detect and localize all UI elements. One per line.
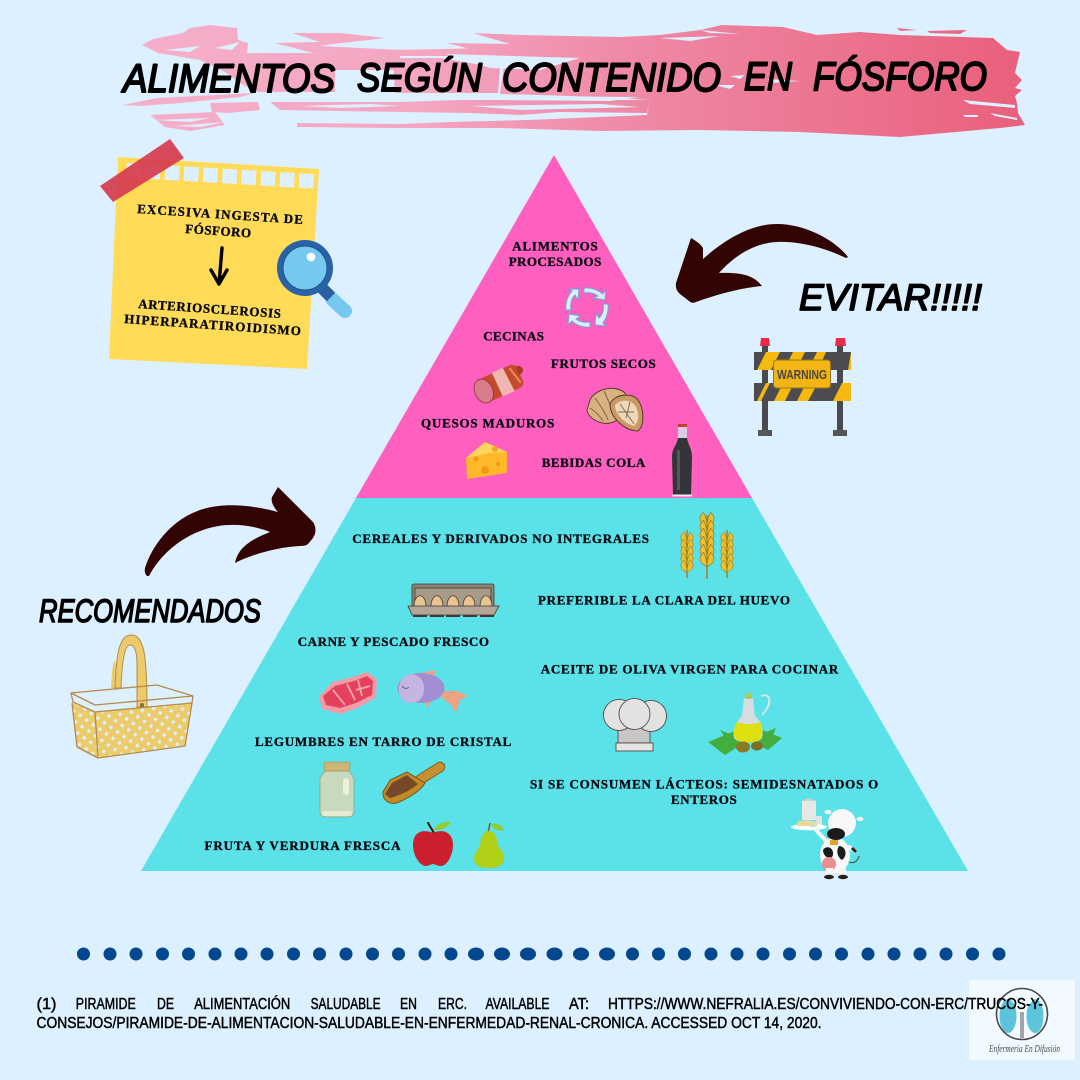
- panel: sticky note: [100, 139, 345, 369]
- pink tier labels: ALIMENTOS: [512, 238, 598, 253]
- footnote citation: AT:: [569, 996, 589, 1013]
- arrow: recomendados: [145, 487, 316, 576]
- cyan tier labels: ENTEROS: [671, 792, 737, 807]
- cyan tier labels: PREFERIBLE LA CLARA DEL HUEVO: [538, 592, 790, 607]
- icon: pear: [474, 823, 504, 868]
- cyan tier labels: SI SE CONSUMEN LÁCTEOS: SEMIDESNATADOS O: [530, 776, 878, 791]
- dotted divider: [77, 948, 1006, 960]
- icon: walnuts: [587, 388, 643, 431]
- pyramid tier: recomendados: [141, 498, 968, 871]
- note holes: [126, 163, 314, 189]
- pink tier labels: FRUTOS SECOS: [551, 356, 656, 371]
- pyramid: [141, 155, 968, 871]
- cyan tier labels: CEREALES Y DERIVADOS NO INTEGRALES: [352, 531, 649, 546]
- note text: HIPERPARATIROIDISMO: [124, 311, 301, 338]
- note text: FÓSFORO: [185, 221, 252, 240]
- icon: cola bottle: [672, 424, 692, 496]
- warning sign text: WARNING: [777, 367, 827, 382]
- title brush stroke: [123, 25, 1025, 137]
- pyramid tier: evitar: [356, 155, 752, 498]
- cyan tier labels: LEGUMBRES EN TARRO DE CRISTAL: [255, 734, 512, 749]
- down arrow: [211, 248, 227, 284]
- footnote citation: DE: [157, 996, 174, 1013]
- icon: salami: [470, 360, 530, 407]
- logo: [969, 980, 1075, 1060]
- cyan tier labels: [204, 531, 878, 853]
- arrow: evitar: [676, 224, 848, 303]
- icon: recycle arrows: [566, 288, 608, 327]
- cyan tier labels: CARNE Y PESCADO FRESCO: [298, 634, 489, 649]
- title: ALIMENTOS: [121, 57, 335, 101]
- footnote citation: CONSEJOS/PIRAMIDE-DE-ALIMENTACION-SALUDABLE-EN-ENFERMEDAD-RENAL-CRONICA. ACCESSED OCT 14, 2020.: [36, 1015, 822, 1032]
- note text: EXCESIVA INGESTA DE: [137, 201, 303, 227]
- icon: basket: [71, 635, 193, 758]
- heading: recomendados: RECOMENDADOS: [39, 593, 261, 629]
- icon: warning barrier: [754, 338, 851, 436]
- icon: chef hat: [604, 698, 666, 751]
- note text: ARTERIOSCLEROSIS: [138, 296, 281, 321]
- title: EN: [744, 55, 792, 99]
- footnote citation: ALIMENTACIÓN: [194, 996, 290, 1013]
- note text: [124, 201, 303, 338]
- icon: magnifying glass: [277, 240, 345, 311]
- title: SEGÚN: [357, 55, 482, 100]
- cyan tier labels: ACEITE DE OLIVA VIRGEN PARA COCINAR: [541, 661, 839, 676]
- cyan tier labels: FRUTA Y VERDURA FRESCA: [204, 838, 401, 853]
- pink tier labels: QUESOS MADUROS: [421, 415, 554, 430]
- icon: cheese: [466, 442, 507, 479]
- pink tier labels: CECINAS: [483, 329, 544, 344]
- footnote citation: AVAILABLE: [486, 996, 550, 1013]
- icon: olive oil: [708, 693, 782, 755]
- footnote citation: (1): [36, 996, 56, 1013]
- footnote citation: ERC.: [438, 996, 467, 1013]
- heading: evitar: EVITAR!!!!!: [799, 277, 982, 318]
- pink tier labels: BEBIDAS COLA: [542, 455, 646, 470]
- icon: wheat: [681, 512, 733, 579]
- pink tier labels: [421, 238, 656, 470]
- icon: egg carton: [408, 584, 499, 616]
- title: CONTENIDO: [502, 56, 721, 100]
- icon: cow with dairy tray: [791, 798, 864, 879]
- icon: wooden scoop with legumes: [383, 767, 440, 803]
- footnote citation: EN: [400, 996, 417, 1013]
- icon: meat: [320, 673, 376, 713]
- footnote citation: [36, 996, 1043, 1032]
- title: FÓSFORO: [813, 54, 987, 99]
- icon: fish: [398, 670, 468, 713]
- note paper: [109, 157, 319, 369]
- footnote citation: PIRAMIDE: [76, 996, 136, 1013]
- icon: glass jar: [320, 762, 354, 817]
- red tape: [100, 139, 184, 202]
- icon: apple: [413, 822, 453, 866]
- footnote citation: SALUDABLE: [311, 996, 381, 1013]
- title: [121, 54, 987, 101]
- pink tier labels: PROCESADOS: [509, 254, 601, 269]
